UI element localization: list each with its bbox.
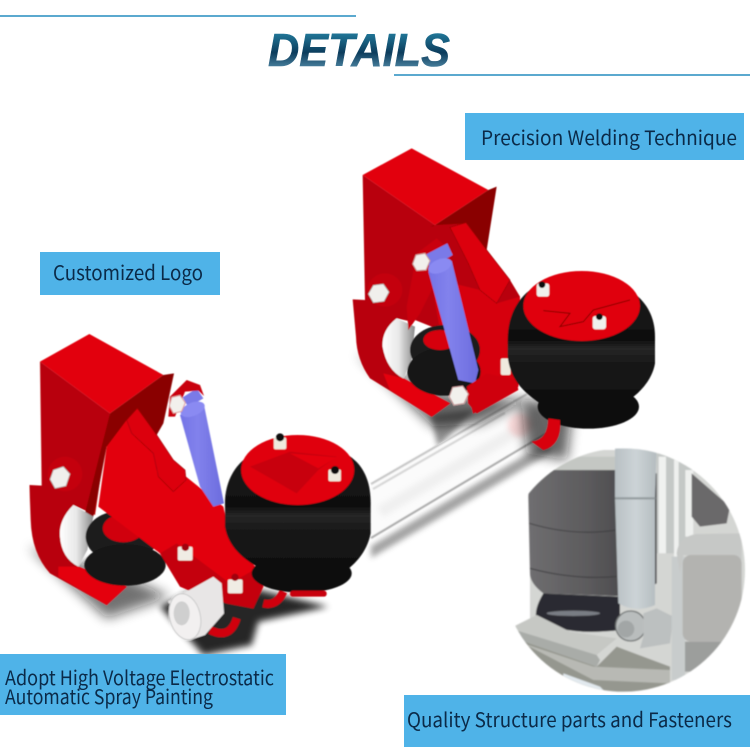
cutout <box>383 318 415 378</box>
lower saddle <box>467 373 518 413</box>
label: precision welding: Precision Welding Technique <box>481 122 737 151</box>
u bolts <box>210 592 283 633</box>
lower base light beam <box>523 643 670 683</box>
bracket frame <box>676 534 742 559</box>
air spring top plate <box>523 271 640 341</box>
top rule left <box>0 15 356 17</box>
bracket lower lip <box>58 567 127 605</box>
photo: air spring close-up circle <box>500 448 747 693</box>
shock bolts <box>413 253 468 405</box>
nuts on arm <box>178 544 243 593</box>
axle stub <box>164 577 224 643</box>
background stripes <box>657 453 693 557</box>
lower bellows <box>407 325 481 396</box>
clevis <box>640 608 673 648</box>
red under spring <box>290 591 327 597</box>
shock cylinder <box>615 448 657 609</box>
left bolt <box>368 273 402 307</box>
lower base <box>520 640 670 693</box>
eye bolt <box>616 611 646 641</box>
link arm <box>127 408 186 492</box>
label: quality structure <box>404 695 750 747</box>
bracket flange <box>430 187 497 250</box>
link arm <box>450 223 510 303</box>
arm lower face <box>160 543 263 608</box>
lower highlights <box>562 672 604 690</box>
left suspension assembly <box>28 334 371 655</box>
shock strut bracket <box>407 238 453 330</box>
bracket front face <box>353 175 450 417</box>
left bolt <box>48 457 82 491</box>
bellows <box>528 470 657 597</box>
hook <box>532 418 560 450</box>
cutout <box>60 505 93 567</box>
photo background <box>530 450 746 682</box>
arm beam <box>98 420 263 608</box>
plate <box>510 615 617 655</box>
label: customized logo: Customized Logo <box>53 257 203 286</box>
hook shadow <box>28 547 170 618</box>
air spring body <box>225 448 371 582</box>
bellows folds <box>529 523 617 577</box>
axle tube <box>371 393 552 558</box>
clamp nut <box>501 358 511 375</box>
shock absorber <box>178 388 224 507</box>
bracket top face <box>40 334 163 413</box>
label: spray painting: Automatic Spray Painting <box>5 681 213 710</box>
shock absorber <box>425 243 478 383</box>
label: spray painting: Adopt High Voltage Electrostatic <box>5 662 274 691</box>
shock top bolt <box>169 395 185 413</box>
distant bellows <box>692 473 730 527</box>
shadow <box>357 353 573 460</box>
bracket flange <box>85 373 174 517</box>
right suspension assembly <box>353 148 655 460</box>
bellows rim <box>536 593 620 632</box>
arm base <box>408 223 520 413</box>
air spring top plate <box>241 433 354 505</box>
air spring lower bulge <box>538 385 639 429</box>
label: quality structure: Quality Structure parts and Fasteners <box>407 704 732 733</box>
bottom rule right <box>394 74 750 76</box>
air spring lower bulge <box>252 554 352 593</box>
bracket front face <box>29 362 127 605</box>
label: customized logo <box>40 252 220 295</box>
label: precision welding <box>465 113 744 160</box>
bracket top face <box>363 148 488 225</box>
stub shadow <box>160 587 328 655</box>
lower bellows <box>84 511 166 586</box>
arm beam <box>430 273 520 413</box>
bracket lower lip <box>383 373 450 417</box>
title: DETAILS <box>268 24 450 76</box>
air spring body <box>508 284 655 413</box>
post <box>672 557 685 680</box>
label: spray painting <box>0 654 286 715</box>
shock top bracket <box>168 380 204 417</box>
